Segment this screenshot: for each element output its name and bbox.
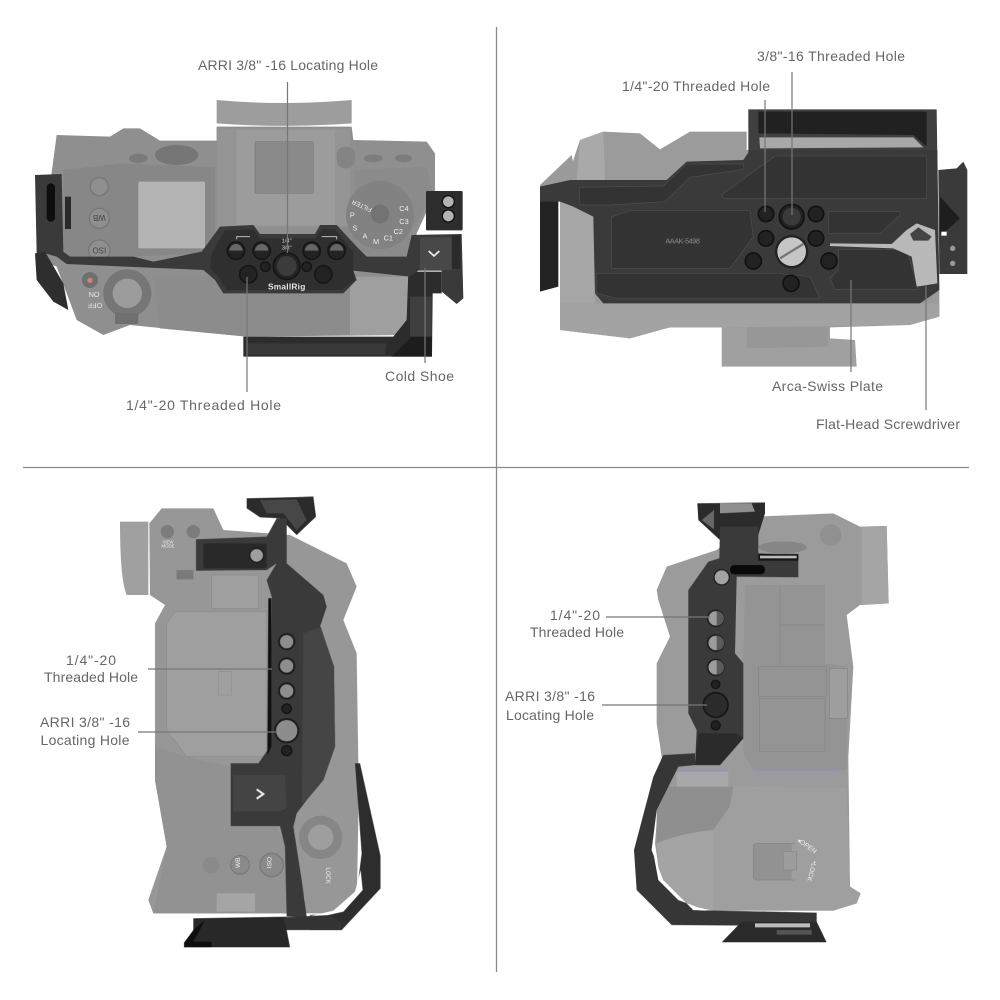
engraving: AAAK-5498: [665, 236, 700, 245]
mode dial: M: [373, 237, 379, 246]
camera body: MODE: [161, 543, 175, 548]
label: locating hole right: Locating Hole: [506, 707, 594, 723]
center plate: [210, 229, 355, 290]
label: threaded hole left: 1/4"-20: [66, 652, 116, 668]
open and lock marks: ◂OPEN: [795, 837, 818, 855]
label: threaded hole right: 1/4"-20: [550, 607, 600, 623]
label: Arca-Swiss plate: Arca-Swiss Plate: [772, 378, 883, 394]
camera body top view: ON: [88, 290, 99, 299]
mode dial: A: [363, 231, 368, 240]
leader lines: bottom view: [765, 72, 926, 410]
panel: top view of cage on camera: 3/8": [282, 245, 292, 251]
screw plate: [203, 543, 267, 568]
label: threaded hole right: Threaded Hole: [530, 624, 624, 640]
camera body: •LOCK: [805, 860, 817, 882]
bottom foot: [184, 917, 290, 947]
camera body: [120, 508, 358, 913]
right bracket: [938, 162, 967, 274]
label: locating hole left: [40, 714, 130, 748]
left slot: [47, 183, 55, 222]
upper hood: [748, 109, 937, 157]
main cage column: [688, 527, 798, 765]
leader lines: top view: [247, 82, 425, 392]
arrow plate: [233, 775, 287, 812]
right curved strap: [310, 763, 381, 930]
mounting holes: [227, 242, 345, 283]
bottom L plate: [243, 272, 442, 357]
camera body top view: [40, 100, 435, 337]
blue seam: [677, 769, 840, 772]
label: locating hole right: ARRI 3/8" -16: [505, 688, 595, 704]
camera body top view: OFF: [87, 301, 102, 310]
camera body top view: ISO: [92, 245, 106, 254]
camera body: LOCK: [324, 868, 330, 884]
label: locating hole right: [505, 688, 595, 723]
hole size marks: 1/4": [282, 239, 292, 245]
top cold shoe: [247, 497, 316, 535]
camera body: [655, 513, 889, 911]
panel: left side view: [120, 497, 381, 947]
holes: [703, 570, 729, 730]
main cage plate: [540, 150, 939, 303]
leader lines: right side view: [602, 617, 710, 705]
label: 1/4 threaded hole: 1/4"-20 Threaded Hole: [622, 78, 770, 94]
camera body: VIEW: [162, 539, 174, 544]
cold shoe with arrow: [420, 235, 460, 270]
slot: [730, 565, 765, 574]
label: threaded hole left: Threaded Hole: [44, 669, 138, 685]
panel: bottom view of cage on camera: [540, 109, 967, 367]
label: cold shoe: Cold Shoe: [385, 368, 454, 384]
camera body top view: WB: [93, 213, 106, 222]
leader lines: left side view: [138, 669, 277, 732]
label: threaded hole left: [44, 652, 138, 685]
mode dial: C1: [384, 234, 393, 243]
mode dial: C2: [394, 227, 403, 236]
camera body: WB: [235, 857, 242, 868]
label: locating hole left: Locating Hole: [40, 732, 130, 748]
mode dial: C4: [399, 204, 409, 213]
panel: right side view: [634, 503, 889, 942]
side arc highlight: [302, 627, 335, 803]
left wedge: [35, 252, 68, 310]
flat-head screwdriver: [830, 223, 937, 287]
camera body: ISO: [267, 857, 274, 868]
bottom bracket: [634, 753, 817, 926]
label: threaded hole: 1/4"-20 Threaded Hole: [126, 397, 281, 413]
top shoe: [697, 503, 765, 540]
mode dial: P: [350, 211, 355, 220]
holes: [275, 634, 298, 742]
mode dial: C3: [399, 217, 409, 226]
recessed pockets: [579, 156, 927, 298]
mode dial: [346, 181, 414, 249]
left bracket: [540, 198, 558, 292]
main cage column: [196, 518, 335, 917]
label: locating hole left: ARRI 3/8" -16: [40, 714, 130, 730]
mode dial: S: [353, 224, 358, 233]
camera body bottom view: [540, 132, 939, 367]
label: threaded hole right: [530, 607, 624, 640]
bottom foot: [722, 922, 827, 942]
thumb screw: [775, 235, 808, 268]
label: ARRI locating hole: ARRI 3/8" -16 Locating Hole: [198, 57, 378, 73]
cold shoe block: [426, 191, 463, 230]
label: flat-head screwdriver: Flat-Head Screwdriver: [816, 416, 960, 432]
panel: top view of cage on camera: [35, 100, 463, 357]
holes: [745, 204, 837, 291]
mode dial: FILTER: [350, 197, 373, 213]
label: 3/8 threaded hole: 3/8"-16 Threaded Hole: [757, 48, 905, 64]
SmallRig logo: SmallRig: [268, 281, 305, 291]
cage top band: [35, 174, 463, 304]
